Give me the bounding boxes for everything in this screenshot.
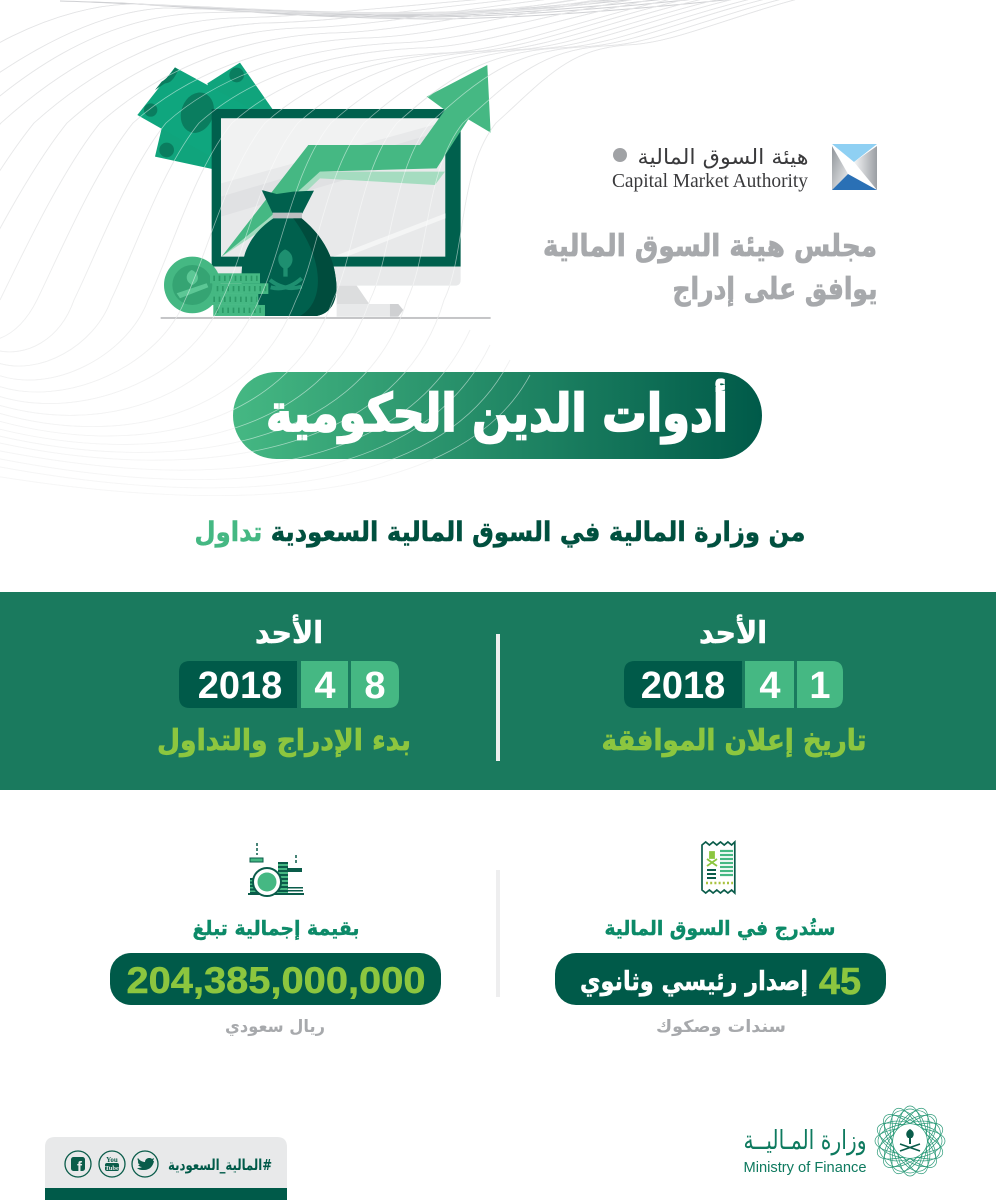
issuance note: سندات وصكوك — [656, 1017, 786, 1037]
issuance label: ستُدرج في السوق المالية — [604, 916, 836, 941]
divider — [496, 634, 500, 761]
date block: approval announcement: 1 — [809, 665, 831, 707]
date block: approval announcement: الأحد — [699, 614, 767, 651]
white wave lines over illustration — [0, 0, 813, 496]
icon: monitor — [212, 109, 461, 317]
icon: CMA emblem — [832, 144, 877, 190]
icon: coins — [248, 843, 304, 896]
icon: receipt — [702, 842, 735, 893]
icon: twitter — [132, 1151, 158, 1177]
issuance pill: إصدار رئيسي وثانوي — [580, 967, 808, 997]
icon: youtube: You — [106, 1156, 118, 1164]
icon: rosette emblem — [873, 1104, 947, 1178]
heading: board approves: يوافق على إدراج — [672, 272, 878, 307]
logo: Capital Market Authority — [612, 144, 877, 192]
cma english name: Capital Market Authority — [612, 170, 808, 192]
icon: money bag — [241, 190, 337, 316]
icon: youtube: Tube — [105, 1165, 119, 1172]
ministry english name: Ministry of Finance — [744, 1160, 866, 1176]
date block: listing and trading start: 4 — [314, 665, 336, 707]
ministry arabic name: وزارة المـاليــة — [744, 1126, 866, 1156]
icon: rising arrow — [222, 65, 491, 257]
issuance pill: 45 — [819, 961, 861, 1003]
date block: listing and trading start: بدء الإدراج والتداول — [157, 723, 411, 757]
heading: board approves: مجلس هيئة السوق المالية — [543, 229, 877, 264]
icon: youtube — [99, 1151, 125, 1177]
logo: Ministry of Finance — [744, 1104, 947, 1178]
panel: social footer — [45, 1137, 287, 1200]
date block: approval announcement: تاريخ إعلان الموافقة — [602, 723, 866, 758]
baseline shelf — [161, 317, 491, 319]
cma arabic name: هيئة السوق المالية — [638, 145, 808, 169]
panel: total value — [110, 843, 441, 1037]
background wave lines — [0, 0, 813, 496]
date block: approval announcement — [602, 614, 866, 758]
value pill: 204,385,000,000 — [126, 960, 426, 1001]
panel: dates band — [0, 592, 996, 790]
value unit: ريال سعودي — [225, 1017, 325, 1037]
cma seal — [613, 148, 627, 162]
subtitle: من وزارة المالية في السوق المالية السعودية تداول — [194, 517, 805, 548]
heading: board approves — [543, 229, 878, 307]
value pill — [110, 953, 441, 1005]
illustration: monitor, rising arrow, money bag and coins — [137, 63, 491, 319]
hashtag: #المالية_السعودية — [168, 1156, 272, 1174]
date block: listing and trading start: الأحد — [255, 614, 323, 651]
icon: facebook — [65, 1151, 91, 1177]
title: أدوات الدين الحكومية — [266, 379, 728, 444]
icon: banknotes — [137, 63, 273, 169]
date block: approval announcement: 4 — [759, 665, 781, 707]
date block: listing and trading start — [157, 614, 411, 757]
icon: facebook: f — [77, 1159, 83, 1176]
date block: listing and trading start: 2018 — [198, 665, 282, 707]
divider lower — [496, 870, 500, 997]
icon: coin — [164, 257, 221, 313]
icon: coin stack — [210, 273, 268, 316]
issuance pill — [555, 953, 886, 1005]
title pill background — [233, 372, 762, 459]
date block: approval announcement: 2018 — [641, 665, 725, 707]
panel: issuances — [555, 842, 886, 1037]
date block: listing and trading start: 8 — [364, 665, 386, 707]
value label: بقيمة إجمالية تبلغ — [192, 916, 360, 940]
